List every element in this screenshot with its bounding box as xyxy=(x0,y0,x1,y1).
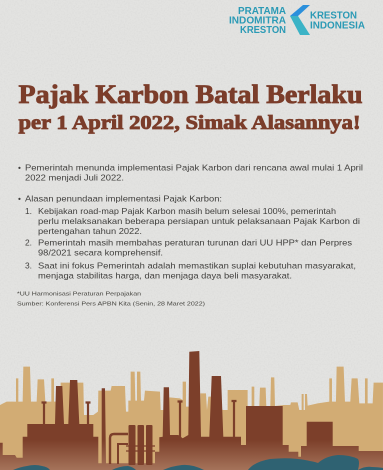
text block: reasons for postponement: Saat ini fokus Pemerintah adalah memastikan suplai kebutuhan masyarakat, xyxy=(38,260,356,270)
logo mark: chevron xyxy=(290,5,310,35)
text block: reasons for postponement: 2. xyxy=(25,238,32,248)
footnote and source: Sumber: Konferensi Pers APBN Kita (Senin, 28 Maret 2022) xyxy=(17,302,205,308)
footnote and source xyxy=(17,292,205,308)
text block: reasons for postponement: perlu melaksanakan beberapa persiapan untuk pelaksanaan Pajak Karbon di xyxy=(38,216,360,226)
text block: reasons for postponement: Alasan penundaan implementasi Pajak Karbon: xyxy=(25,194,222,204)
illustration: industrial skyline xyxy=(0,351,383,470)
text block: reasons for postponement: Pemerintah masih membahas peraturan turunan dari UU HPP* dan Perpres xyxy=(38,238,352,248)
text block: postponement statement: • xyxy=(18,162,21,172)
text block: postponement statement xyxy=(18,162,363,183)
thin chimneys and pipes xyxy=(42,401,236,464)
text block: reasons for postponement: 1. xyxy=(25,206,32,216)
text block: reasons for postponement xyxy=(18,194,360,280)
title: Pajak Karbon Batal Berlaku xyxy=(18,79,363,109)
text block: reasons for postponement: pertengahan tahun 2022. xyxy=(38,226,142,236)
logo text: Pratama Indomitra Kreston: KRESTON xyxy=(240,25,286,36)
text block: reasons for postponement: Kebijakan road-map Pajak Karbon masih belum selesai 100%, pemerintah xyxy=(38,206,336,216)
logo text: Kreston Indonesia xyxy=(310,10,365,32)
logo text: Pratama Indomitra Kreston: PRATAMA xyxy=(238,6,286,17)
text block: reasons for postponement: • xyxy=(18,194,21,204)
text block: postponement statement: Pemerintah menunda implementasi Pajak Karbon dari rencana awal mulai 1 April xyxy=(25,163,363,173)
background factories (tan) xyxy=(0,367,383,470)
title xyxy=(18,79,363,134)
text block: reasons for postponement: 98/2021 secara komprehensif. xyxy=(38,248,163,258)
ground shrubs (teal) xyxy=(13,455,383,470)
title: per 1 April 2022, Simak Alasannya! xyxy=(18,112,360,134)
text block: postponement statement: 2022 menjadi Juli 2022. xyxy=(25,173,124,183)
refinery columns xyxy=(128,425,152,465)
text block: reasons for postponement: menjaga stabilitas harga, dan menjaga daya beli masyarakat. xyxy=(38,270,292,280)
logo text: Pratama Indomitra Kreston xyxy=(229,6,286,36)
logo text: Kreston Indonesia: KRESTON xyxy=(310,10,357,22)
logo: Pratama Indomitra Kreston and Kreston Indonesia xyxy=(229,5,365,36)
logo text: Kreston Indonesia: INDONESIA xyxy=(310,20,365,32)
text block: reasons for postponement: 3. xyxy=(25,260,32,270)
footnote and source: *UU Harmonisasi Peraturan Perpajakan xyxy=(17,292,141,298)
logo text: Pratama Indomitra Kreston: INDOMITRA xyxy=(229,16,286,26)
foreground factories (brown) xyxy=(0,351,383,470)
